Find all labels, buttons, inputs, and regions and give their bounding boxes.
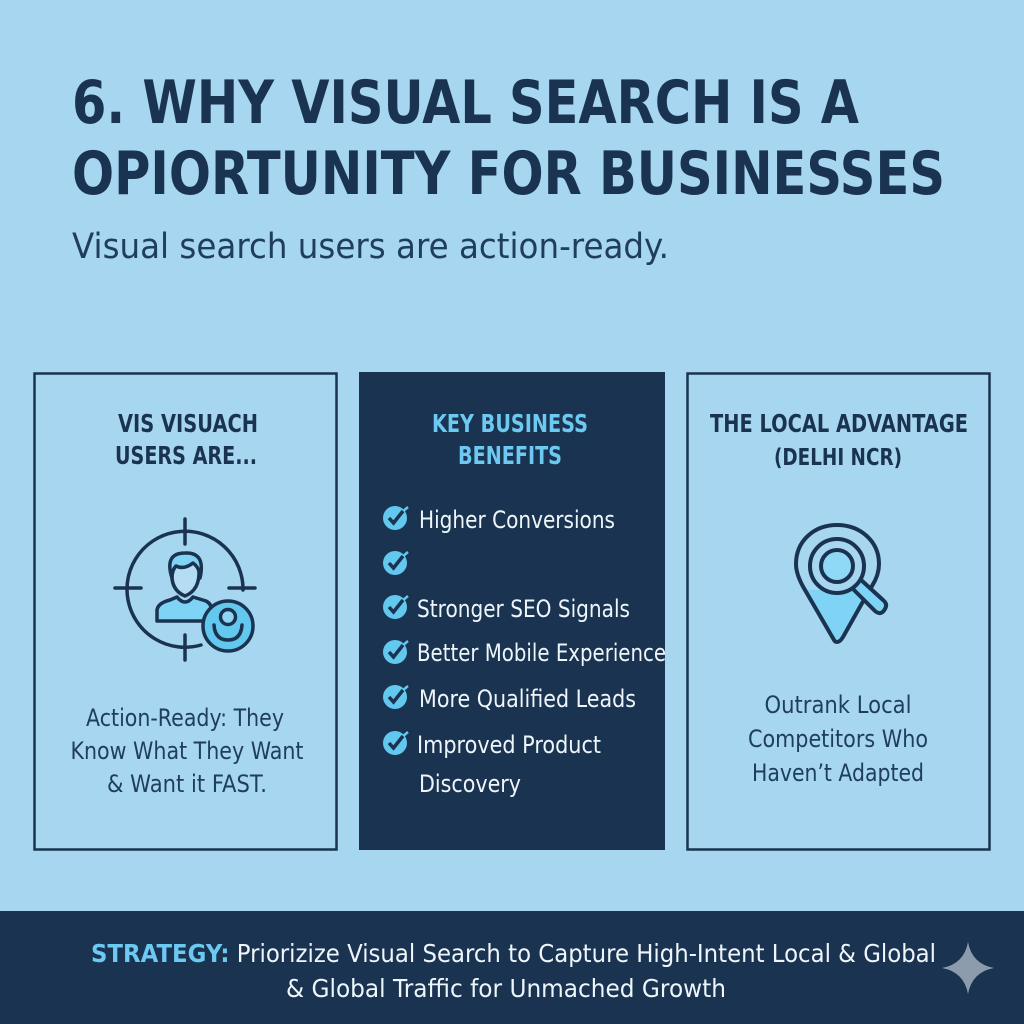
benefits list: Improved Product	[417, 731, 601, 759]
panel background	[359, 372, 665, 850]
benefits list: Better Mobile Experience	[417, 639, 666, 667]
strategy text: STRATEGY: Priorizize Visual Search to Capture High-Intent Local & Global	[91, 939, 936, 968]
banner background	[0, 911, 1024, 1024]
strategy text	[91, 939, 936, 1003]
benefits list: Discovery	[419, 770, 521, 798]
panel border	[34, 374, 336, 850]
panel caption: Competitors Who	[748, 725, 928, 753]
icon: check 1	[383, 506, 408, 530]
panel heading	[115, 409, 258, 470]
panel heading: USERS ARE...	[115, 441, 257, 470]
icon: check 5	[383, 685, 408, 709]
benefits list	[417, 506, 666, 798]
panel heading	[710, 409, 968, 471]
panel caption: & Want it FAST.	[107, 770, 267, 798]
panel border	[688, 374, 990, 850]
icon: check 2	[383, 551, 408, 575]
panel: users	[34, 374, 336, 850]
strategy text: & Global Traffic for Unmached Growth	[286, 974, 726, 1003]
panel caption: Action-Ready: They	[86, 704, 284, 732]
icon: sparkle	[942, 942, 994, 994]
panel caption: Outrank Local	[764, 691, 912, 719]
footer strategy banner	[0, 911, 1024, 1024]
icon: check 4	[383, 640, 408, 664]
title	[72, 68, 945, 209]
panel caption: Know What They Want	[70, 737, 304, 765]
panel caption	[748, 691, 928, 787]
subtitle: Visual search users are action-ready.	[72, 227, 669, 267]
benefits list: Stronger SEO Signals	[417, 595, 630, 623]
panel caption	[70, 704, 304, 798]
panel: key business benefits	[359, 372, 666, 850]
title: 6. WHY VISUAL SEARCH IS A	[72, 68, 859, 138]
panel heading	[432, 409, 588, 470]
panel heading: KEY BUSINESS	[432, 409, 588, 438]
icon: check 6	[383, 731, 408, 755]
benefits list: Higher Conversions	[419, 506, 615, 534]
panel: the local advantage	[688, 374, 990, 850]
icon: target on user	[115, 519, 255, 660]
panel caption: Haven’t Adapted	[752, 759, 924, 787]
panel heading: BENEFITS	[458, 441, 562, 470]
benefits list: More Qualified Leads	[419, 685, 636, 713]
panel heading: VIS VISUACH	[118, 409, 258, 438]
icon: map pin with magnifier	[796, 525, 886, 642]
panel heading: (DELHI NCR)	[774, 445, 902, 471]
icon: check 3	[383, 595, 408, 619]
